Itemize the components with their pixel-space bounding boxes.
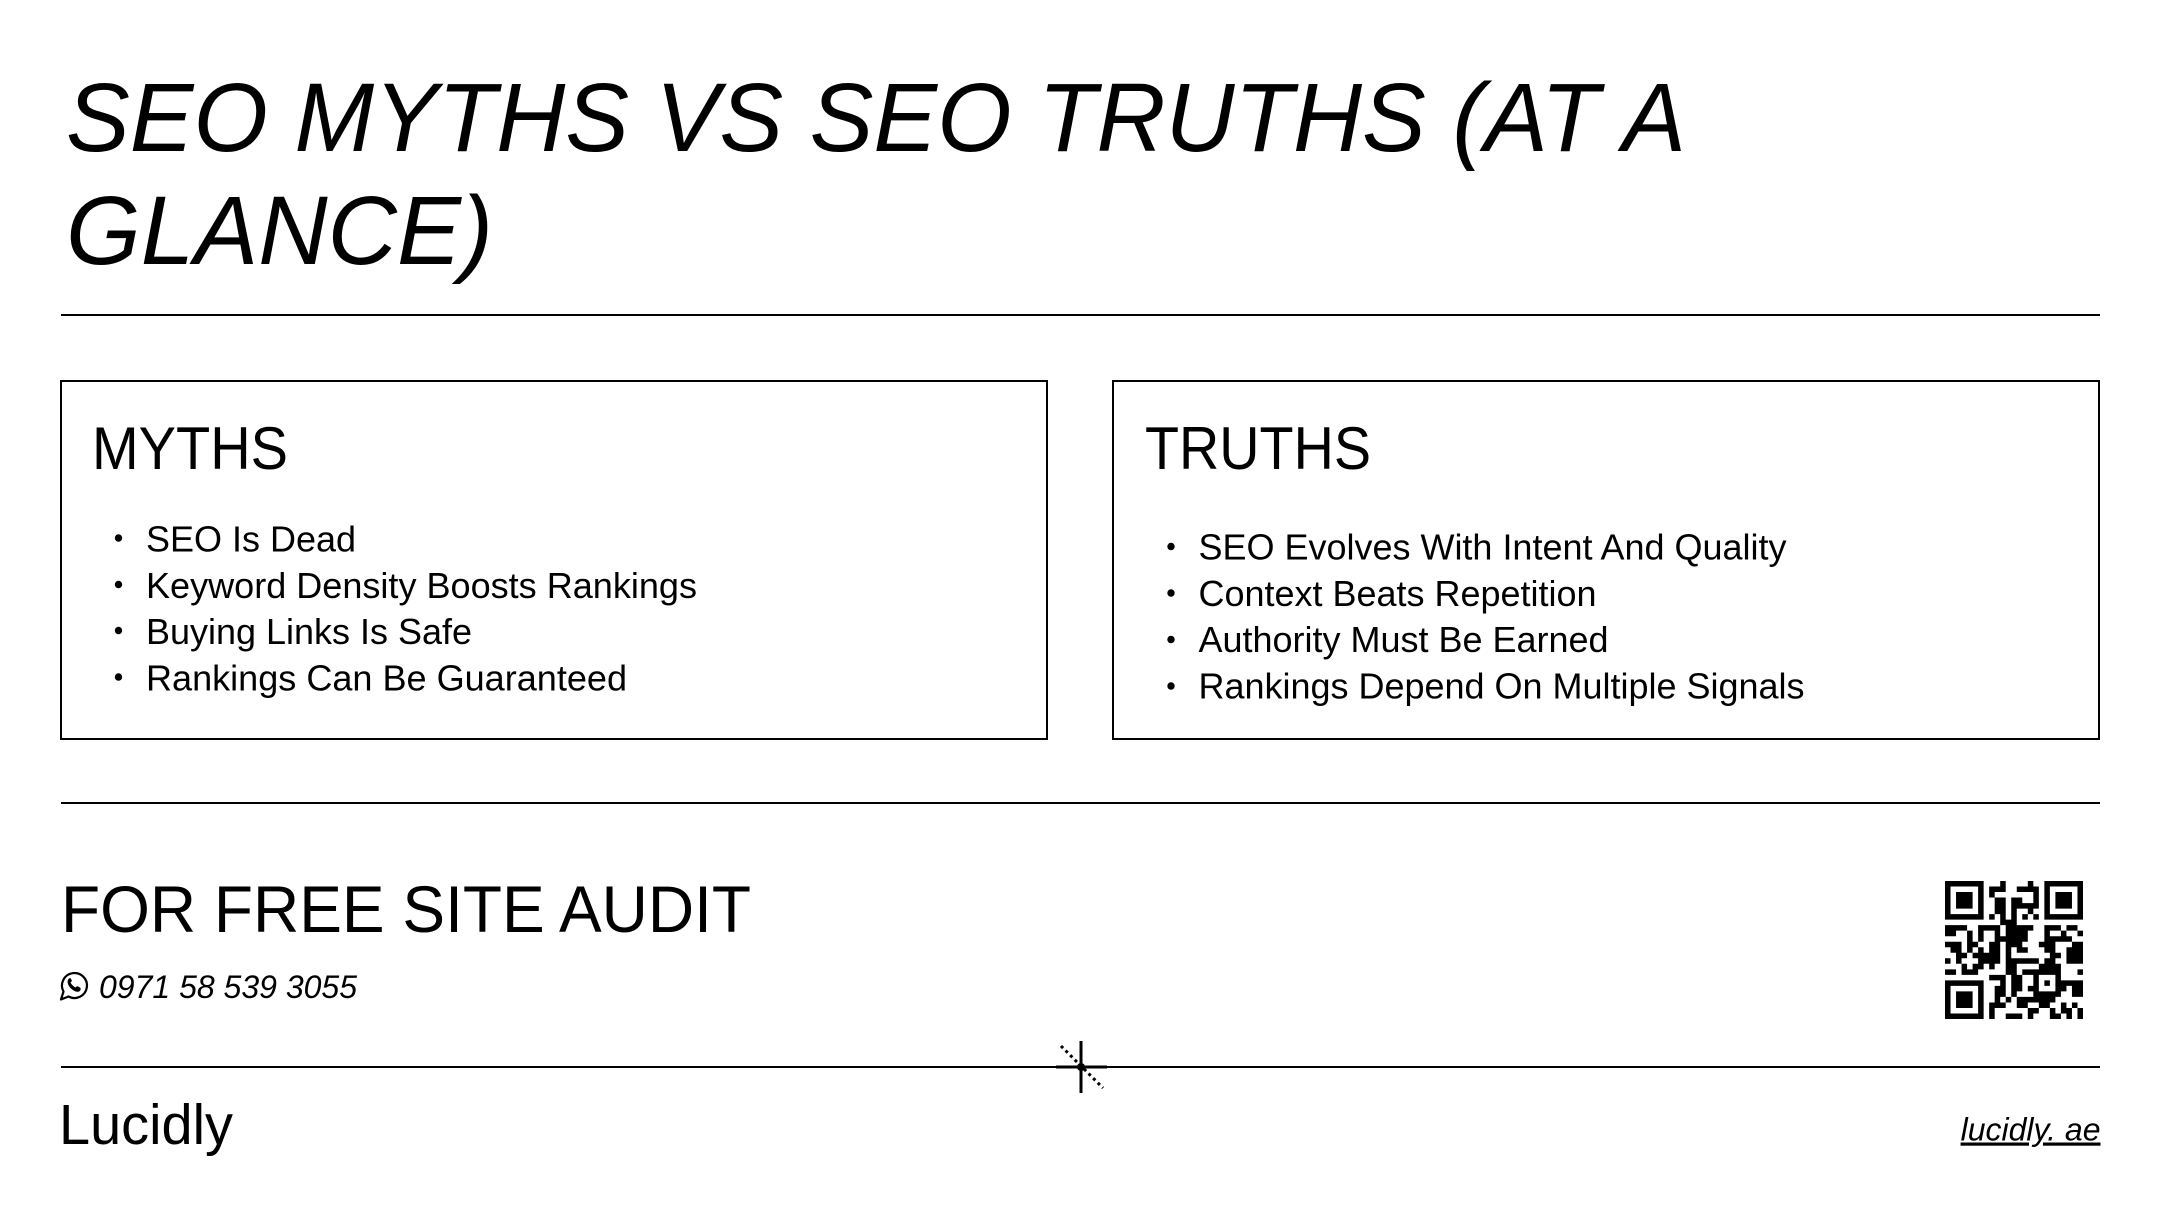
title: SEO MYTHS VS SEO TRUTHS (AT A <box>66 63 1686 172</box>
website link: lucidly. ae <box>1961 1112 2100 1148</box>
list: truths: Authority Must Be Earned <box>1198 619 1608 660</box>
qr code <box>1945 881 2083 1019</box>
heading: myths: MYTHS <box>92 415 288 482</box>
logo: lucidly: Lucidly <box>59 1093 233 1157</box>
heading: truths: TRUTHS <box>1145 415 1371 482</box>
list: myths <box>115 518 697 698</box>
list: truths: Rankings Depend On Multiple Signals <box>1198 666 1804 706</box>
title <box>66 63 1686 285</box>
list: myths: Buying Links Is Safe <box>146 611 472 652</box>
icon: whatsapp <box>61 973 87 1000</box>
panel: myths <box>61 381 1047 739</box>
panel: truths <box>1113 381 2099 739</box>
phone contact <box>61 969 357 1005</box>
call to action heading: FOR FREE SITE AUDIT <box>61 872 751 946</box>
list: truths <box>1167 526 1804 706</box>
list: myths: Keyword Density Boosts Rankings <box>146 565 697 606</box>
list: myths: SEO Is Dead <box>146 518 356 560</box>
list: myths: Rankings Can Be Guaranteed <box>146 658 627 698</box>
icon: asterisk star <box>1056 1041 1107 1093</box>
list: truths: Context Beats Repetition <box>1198 573 1596 614</box>
phone number: 0971 58 539 3055 <box>99 969 357 1005</box>
title: GLANCE) <box>66 176 493 285</box>
list: truths: SEO Evolves With Intent And Quality <box>1198 526 1786 568</box>
